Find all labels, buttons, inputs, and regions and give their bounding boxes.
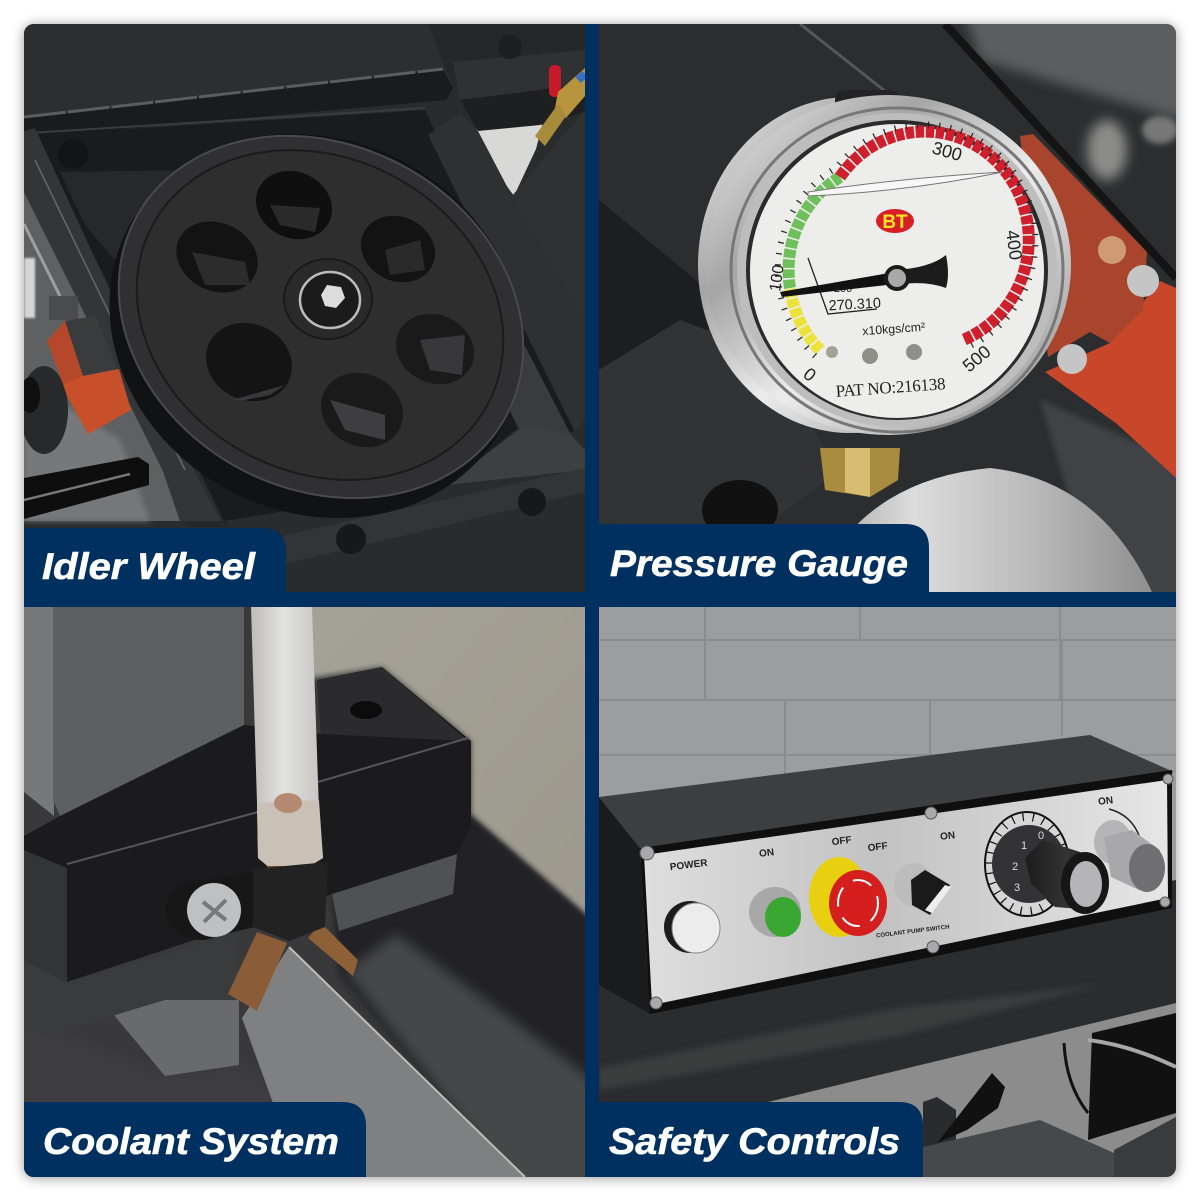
- black handle: [24, 457, 149, 519]
- limit switch orange: [20, 296, 131, 454]
- label: Pressure Gauge: [585, 524, 929, 592]
- grey upright column: [24, 607, 244, 816]
- label: Idler Wheel: Idler Wheel: [42, 546, 256, 587]
- emergency stop: [809, 857, 887, 937]
- front frame: [282, 468, 585, 564]
- set point marker: 200: [834, 283, 852, 295]
- gauge scale numbers: 500: [959, 341, 995, 376]
- patent text: PAT NO:216138: [835, 374, 946, 401]
- speed knob and arrow: [1094, 809, 1165, 892]
- set point marker: [808, 258, 926, 338]
- block wall: [599, 607, 1176, 790]
- box interior: [24, 110, 585, 521]
- set point marker: 270.310: [828, 296, 881, 314]
- wheel spoke holes: [176, 170, 474, 447]
- panel: pressure gauge photo: [599, 0, 1200, 600]
- label: Coolant System: [24, 1102, 366, 1177]
- dial: 3: [1014, 882, 1020, 894]
- gauge scale numbers: 400: [1002, 229, 1026, 261]
- control labels: COOLANT PUMP SWITCH: [876, 925, 950, 939]
- bolt and washer: [187, 883, 241, 937]
- dark machine background: [599, 0, 1200, 600]
- label: Safety Controls: [585, 1102, 923, 1177]
- control labels: ON: [759, 847, 775, 860]
- BT logo: [876, 209, 914, 233]
- BT logo: BT: [882, 212, 908, 233]
- control labels: ON: [1098, 795, 1114, 808]
- floor and table below box: [599, 880, 1176, 1177]
- saw blade: [242, 947, 525, 1177]
- dial: 0: [1038, 830, 1044, 842]
- aluminium cylinder: [858, 468, 1152, 592]
- selector switch: [894, 863, 951, 915]
- dial: 1: [1021, 840, 1027, 852]
- coolant bottle and brass valve: [460, 65, 585, 196]
- brass stem: [820, 448, 900, 497]
- label: Pressure Gauge: Pressure Gauge: [610, 543, 908, 584]
- vise and lever: [923, 1073, 1176, 1177]
- gauge scale numbers: 100: [767, 264, 788, 293]
- blurred background: [0, 590, 620, 1200]
- label: Safety Controls: Safety Controls: [609, 1121, 900, 1162]
- screws: [640, 774, 1173, 1009]
- gauge scale numbers: 300: [930, 138, 964, 165]
- dial: [985, 812, 1109, 916]
- power button: [664, 901, 720, 953]
- pressure gauge: [698, 90, 1071, 435]
- control box: [599, 735, 1174, 1014]
- label: Idler Wheel: [24, 528, 286, 592]
- gauge scale numbers: 0: [799, 364, 820, 386]
- glass reflection: [808, 172, 1003, 196]
- panel: coolant system photo: [24, 607, 585, 1177]
- silver face plate: [644, 780, 1168, 1005]
- control labels: ON: [940, 830, 956, 843]
- control labels: OFF: [867, 841, 888, 854]
- control labels: OFF: [831, 835, 852, 848]
- box top: [599, 735, 1174, 848]
- black clamp block: [24, 667, 471, 1076]
- control labels: [669, 795, 1114, 939]
- panel: safety controls photo: [599, 607, 1176, 1177]
- green button: [749, 887, 801, 937]
- idler wheel: [110, 134, 524, 518]
- red switch: [1020, 134, 1176, 478]
- gauge scale numbers: [767, 138, 1026, 386]
- needle: [780, 255, 948, 297]
- gauge scale: [778, 125, 1035, 356]
- hinged lid: [24, 24, 522, 135]
- dial: 2: [1012, 861, 1018, 873]
- nozzle: [195, 863, 358, 1011]
- clear coolant tube: [251, 607, 323, 872]
- face screws: [826, 344, 922, 364]
- set point marker: x10kgs/cm²: [862, 320, 926, 338]
- control labels: POWER: [669, 858, 709, 873]
- wheel hub: [284, 259, 372, 339]
- label: Coolant System: Coolant System: [43, 1121, 339, 1162]
- panel: idler wheel photo: [20, 24, 591, 592]
